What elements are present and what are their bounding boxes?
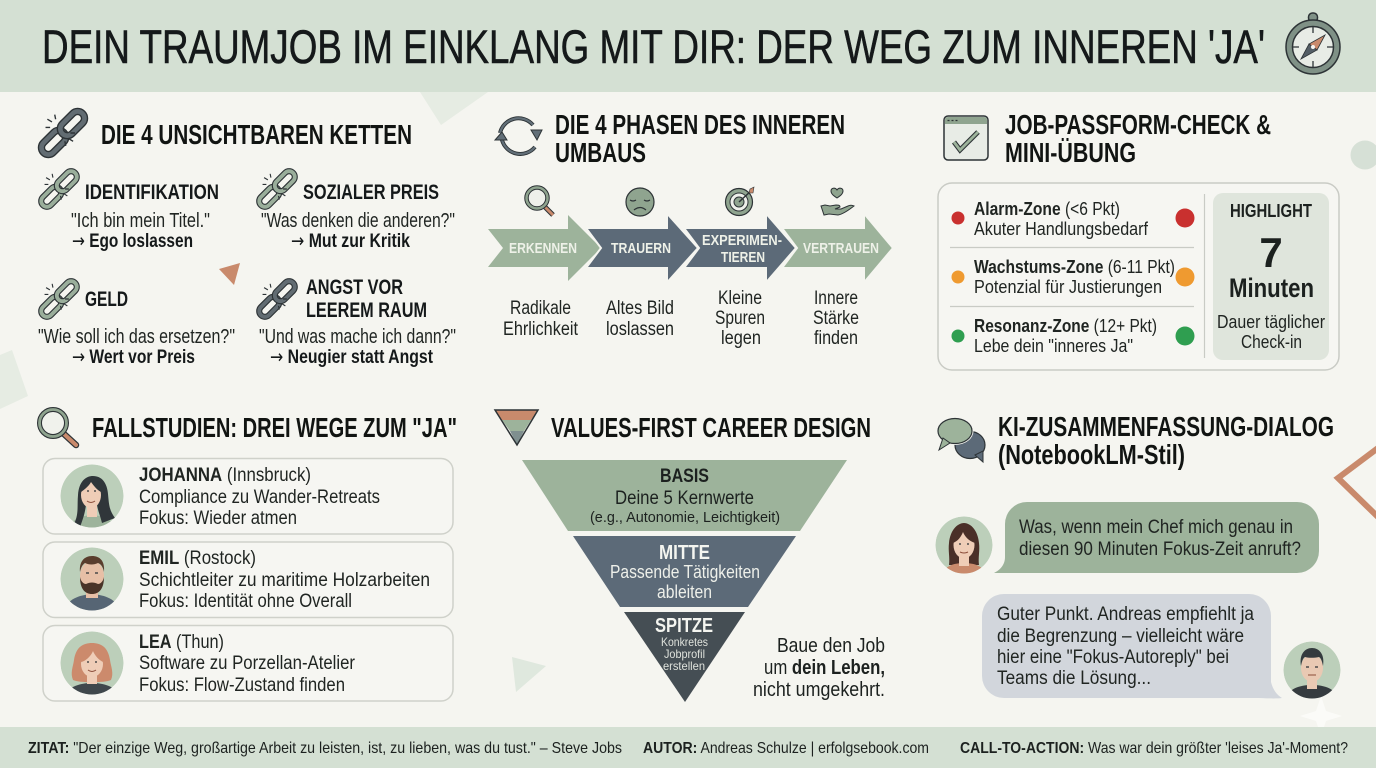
pyramid: mitte: ableiten (657, 582, 712, 602)
speech bubble: question (994, 502, 1319, 573)
panel: die 4 unsichtbaren ketten (38, 109, 456, 368)
zone: alarm: Akuter Handlungsbedarf (974, 219, 1149, 239)
callout (753, 635, 885, 701)
card: emil: EMIL (Rostock) (139, 548, 256, 569)
pyramid: mitte: MITTE (659, 542, 710, 564)
avatar: johanna (60, 464, 124, 530)
icon: broken chain (39, 109, 87, 157)
item: sozialer preis: "Was denken die anderen?" (261, 210, 455, 232)
speech bubble: question: Was, wenn mein Chef mich genau in (1019, 517, 1293, 538)
pyramid: spitze: Konkretes (661, 635, 708, 649)
card: johanna: Compliance zu Wander-Retreats (139, 487, 380, 508)
zone: resonanz (952, 316, 1194, 356)
card: johanna: JOHANNA (Innsbruck) (139, 465, 311, 486)
icon: cycle arrows (495, 118, 542, 154)
icon: magnifier (526, 188, 553, 215)
highlight box: Dauer täglicher (1217, 312, 1325, 332)
highlight box: 7 (1259, 229, 1283, 276)
speech bubble: answer: Guter Punkt. Andreas empfiehlt ja (997, 604, 1254, 625)
highlight box: HIGHLIGHT (1230, 201, 1312, 221)
arrow: trauern (586, 214, 698, 282)
heading: DIE 4 UNSICHTBAREN KETTEN (101, 119, 412, 150)
item: geld: → Wert vor Preis (72, 346, 195, 368)
item: sozialer preis: SOZIALER PREIS (303, 181, 439, 204)
speech bubble: answer: die Begrenzung – vielleicht wäre (997, 626, 1244, 647)
icon: compass (1286, 13, 1340, 74)
panel: ki-dialog: (NotebookLM-Stil) (998, 439, 1185, 470)
phase captions: loslassen (606, 319, 674, 340)
speech bubble: answer: Teams die Lösung... (997, 668, 1151, 689)
footer band (0, 727, 1376, 768)
item: angst vor leerem raum: ANGST VOR (306, 276, 403, 299)
phase captions: Ehrlichkeit (503, 319, 579, 340)
footer: call to action: CALL-TO-ACTION: Was war dein größter 'leises Ja'-Moment? (960, 740, 1348, 757)
item: geld (38, 279, 235, 368)
speech bubble: answer: hier eine "Fokus-Autoreply" bei (997, 647, 1229, 668)
card: lea (43, 626, 453, 701)
heading: DIE 4 PHASEN DES INNEREN (555, 109, 845, 140)
item: sozialer preis (257, 169, 455, 252)
panel: job-passform-check (938, 109, 1339, 370)
speech bubble: answer (982, 594, 1282, 698)
icon: magnifier large (40, 410, 76, 445)
highlight box (1213, 193, 1329, 360)
zone: wachstum (952, 257, 1194, 297)
pyramid: spitze (624, 612, 745, 702)
card: lea: Software zu Porzellan-Atelier (139, 653, 356, 674)
phase captions: Altes Bild (606, 298, 674, 319)
arrow: trauern: TRAUERN (611, 240, 671, 257)
pyramid: basis (522, 460, 847, 531)
icon: chat bubbles (936, 417, 985, 462)
item: identifikation: "Ich bin mein Titel." (71, 210, 210, 232)
callout: Baue den Job (777, 635, 885, 657)
icon: inverted pyramid (495, 410, 538, 445)
highlight box: Check-in (1241, 332, 1302, 352)
card: johanna: Fokus: Wieder atmen (139, 508, 297, 529)
zone: resonanz: Lebe dein "inneres Ja" (974, 336, 1133, 356)
pyramid: spitze: Jobprofil (664, 647, 705, 661)
callout: um dein Leben, (764, 657, 885, 679)
phase captions: legen (721, 328, 761, 349)
phase captions: Stärke (813, 308, 859, 329)
card: emil: Fokus: Identität ohne Overall (139, 591, 352, 612)
arrow: erkennen (488, 215, 601, 281)
phase captions: Spuren (715, 308, 765, 329)
panel: values-first career design (495, 410, 885, 702)
highlight box: Minuten (1229, 273, 1314, 303)
arrow: vertrauen: VERTRAUEN (803, 240, 879, 257)
panel: fallstudien (40, 410, 457, 701)
arrow: experimentieren (684, 214, 796, 282)
arrow: vertrauen (782, 214, 893, 282)
arrow: experimentieren: TIEREN (721, 249, 765, 266)
phase captions: Kleine (718, 288, 762, 309)
phase captions: finden (814, 328, 858, 349)
pyramid: basis: Deine 5 Kernwerte (615, 488, 754, 509)
card: lea: Fokus: Flow-Zustand finden (139, 675, 345, 696)
pyramid: basis: BASIS (660, 466, 709, 487)
avatar: woman (936, 516, 992, 574)
footer: zitat: ZITAT: "Der einzige Weg, großartige Arbeit zu leisten, ist, zu lieben, was du tust." – Steve Jobs (28, 740, 622, 757)
phase captions: Radikale (510, 298, 571, 319)
avatar: man (1284, 642, 1340, 699)
icon: sad face (626, 188, 654, 216)
item: angst vor leerem raum: "Und was mache ich dann?" (259, 326, 456, 348)
heading: VALUES-FIRST CAREER DESIGN (551, 412, 871, 443)
pyramid: spitze: SPITZE (655, 615, 713, 637)
panel: ki-dialog (936, 411, 1340, 699)
zone: alarm: Alarm-Zone (<6 Pkt) (974, 199, 1120, 219)
item: geld: "Wie soll ich das ersetzen?" (38, 326, 235, 348)
card: lea: LEA (Thun) (139, 632, 224, 653)
panel: job-passform-check: MINI-ÜBUNG (1005, 137, 1136, 168)
pyramid: basis: (e.g., Autonomie, Leichtigkeit) (590, 509, 780, 526)
panel: die 4 phasen (488, 109, 893, 349)
card: emil (43, 542, 453, 618)
item: sozialer preis: → Mut zur Kritik (291, 230, 410, 252)
arrow: erkennen: ERKENNEN (509, 240, 577, 257)
item: geld: GELD (85, 288, 128, 311)
avatar: lea (60, 632, 124, 698)
header band (0, 0, 1376, 92)
zone: wachstum: Potenzial für Justierungen (974, 277, 1162, 297)
icon: hand with heart (821, 188, 854, 215)
icon: target (726, 187, 754, 216)
phase captions: Innere (814, 288, 858, 309)
pyramid: mitte (573, 536, 796, 607)
zone: wachstum: Wachstums-Zone (6-11 Pkt) (974, 257, 1175, 277)
phase captions (503, 288, 859, 349)
card: johanna (43, 458, 453, 534)
icon: browser check (944, 116, 988, 160)
heading: JOB-PASSFORM-CHECK & (1005, 109, 1271, 140)
zone: resonanz: Resonanz-Zone (12+ Pkt) (974, 316, 1157, 336)
avatar: emil (60, 548, 124, 612)
item: identifikation: → Ego loslassen (72, 230, 193, 252)
speech bubble: question: diesen 90 Minuten Fokus-Zeit anruft? (1019, 539, 1301, 560)
item: angst vor leerem raum: → Neugier statt Angst (270, 346, 434, 368)
pyramid: mitte: Passende Tätigkeiten (610, 562, 760, 582)
item: angst vor leerem raum (257, 276, 456, 368)
card: emil: Schichtleiter zu maritime Holzarbeiten (139, 570, 430, 591)
pyramid: spitze: erstellen (663, 659, 705, 673)
heading: FALLSTUDIEN: DREI WEGE ZUM "JA" (92, 412, 457, 443)
item: angst vor leerem raum: LEEREM RAUM (306, 299, 427, 322)
zone: alarm (952, 199, 1194, 239)
item: identifikation: IDENTIFIKATION (85, 181, 219, 204)
item: identifikation (39, 169, 219, 252)
arrow: experimentieren: EXPERIMEN- (702, 232, 782, 249)
zones card (938, 183, 1339, 370)
panel: die 4 phasen: UMBAUS (555, 137, 646, 168)
footer: autor: AUTOR: Andreas Schulze | erfolgsebook.com (643, 740, 929, 757)
callout: nicht umgekehrt. (753, 679, 885, 701)
